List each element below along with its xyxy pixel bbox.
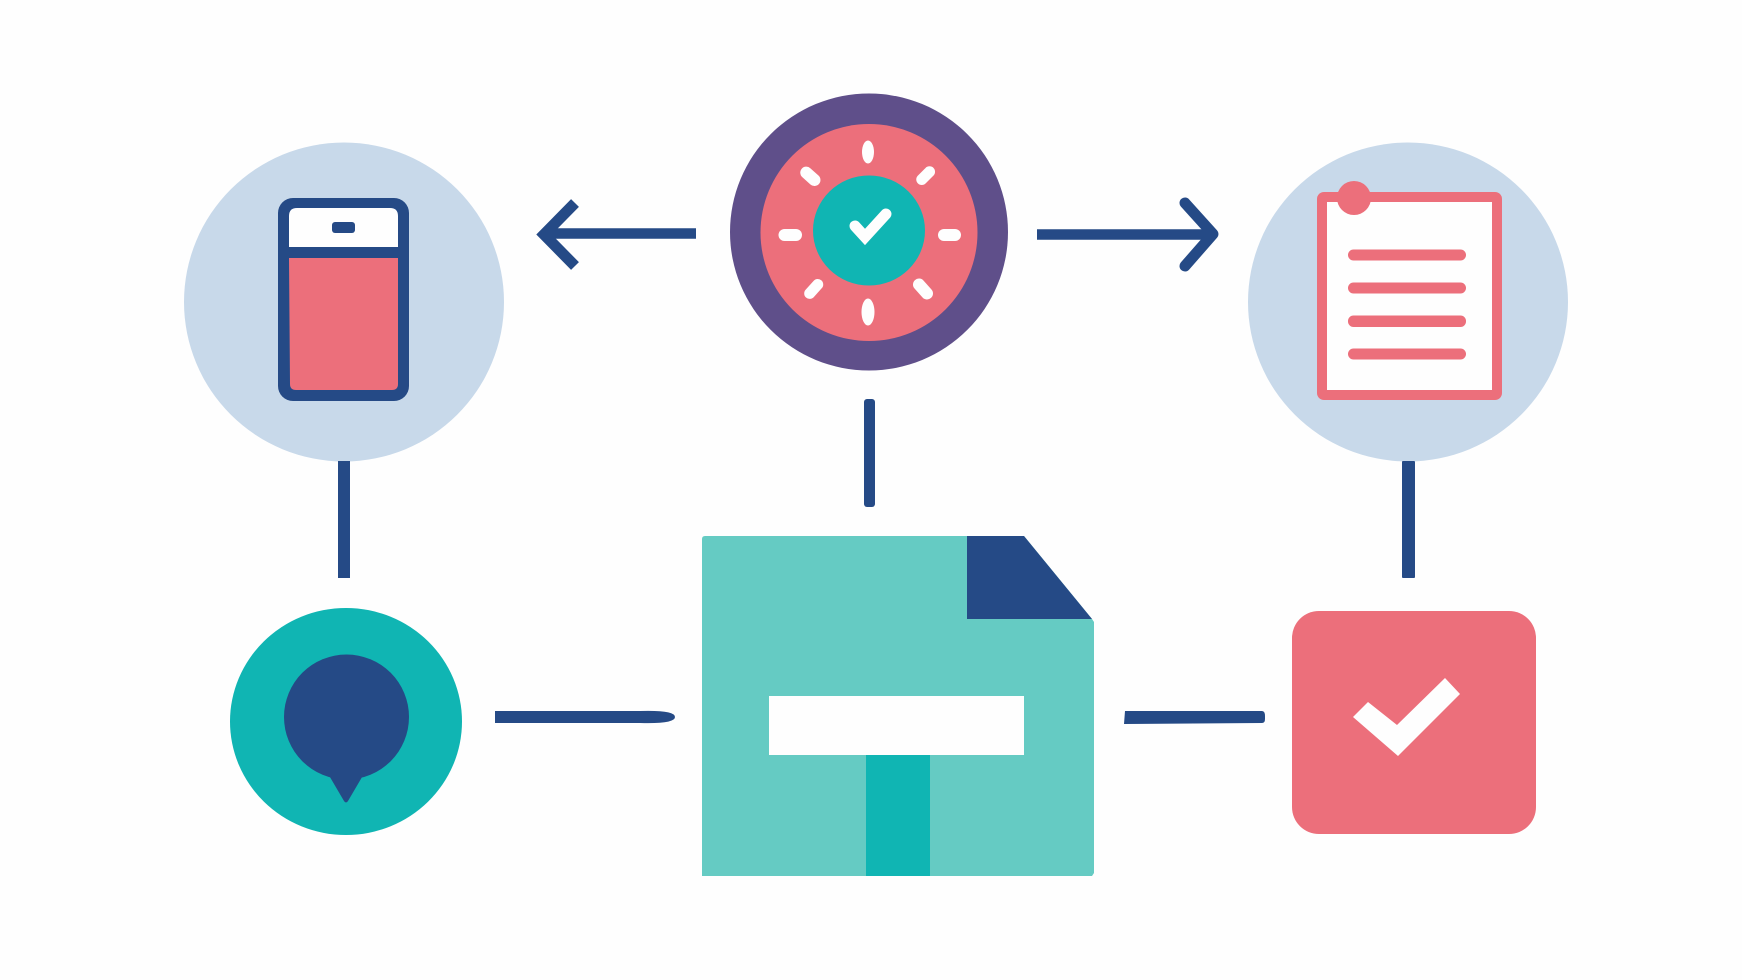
- icon: chat bubble circle: [230, 608, 462, 835]
- icon: speech bubble: [284, 654, 409, 802]
- icon: check mark: [855, 214, 886, 237]
- panel: left circle with phone: [184, 142, 504, 462]
- icon: phone: [278, 198, 409, 401]
- connector: left horizontal: [495, 711, 675, 723]
- connector: right vertical: [1402, 461, 1415, 578]
- icon: clipboard: [1317, 181, 1502, 400]
- connector: right horizontal: [1124, 711, 1265, 724]
- icon: central badge with check: [730, 94, 1008, 370]
- panel: right circle with clipboard: [1248, 142, 1568, 462]
- connector: left vertical: [338, 461, 350, 578]
- arrow: pointing left: [544, 203, 696, 266]
- panel: central document: [702, 536, 1094, 876]
- panel: red check tile: [1292, 611, 1536, 834]
- arrow: pointing right: [1037, 203, 1213, 266]
- connector: center vertical: [864, 399, 875, 507]
- icon: large check: [1353, 678, 1460, 756]
